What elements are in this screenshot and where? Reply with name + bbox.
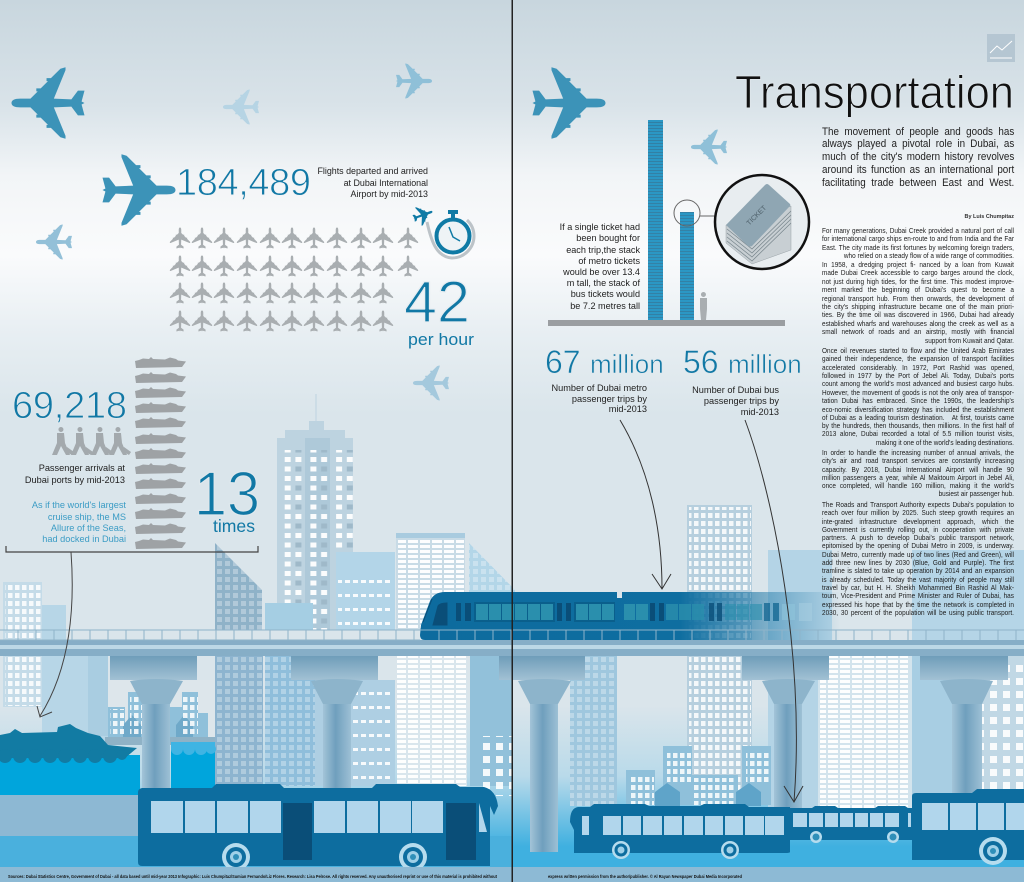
icon: walking passengers [52, 427, 131, 455]
bus caption: Number of Dubai bus [692, 385, 779, 395]
body paragraph 3: Once oil revenues started to flow and the United Arab Emirates [822, 346, 1014, 355]
body paragraph 4 [822, 388, 1014, 447]
body paragraph 6: tramline is slated to take up operation by 2014 and an expansion [822, 566, 1014, 575]
intro paragraph: much of the city's modern history revolves [822, 151, 1014, 163]
stat: 56 million [683, 344, 802, 380]
ticket caption [560, 222, 640, 311]
body paragraph 6: is already scheduled. Today the vast majority of people may still [822, 575, 1014, 584]
body paragraph 1: who relied on a steady flow of a wide range of commodities. [844, 251, 1014, 260]
metro train [420, 592, 840, 640]
body paragraph 6: travel by car, but H. H. Sheikh Mohammed Bin Rashid Al Mak- [822, 583, 1014, 592]
passenger caption: Dubai ports by mid-2013 [25, 475, 125, 485]
body paragraph 4: However, the movement of goods is not the only area of transpor- [822, 388, 1014, 397]
stat: 42 per hour: per hour [408, 331, 475, 349]
ticket caption: been bought for [576, 233, 640, 243]
body paragraph 4: of Dubai as a leading tourism destination. At first, tourists came [822, 413, 1014, 422]
body paragraph 5: once completed, will handle 160 million, making it the world's [822, 481, 1014, 490]
body paragraph 1: East. The city made its first fortunes by welcoming foreign traders, [822, 243, 1014, 252]
body paragraph 2: ment marked the beginning of Dubai's quest to become a [822, 285, 1014, 294]
body paragraph 2 [822, 260, 1014, 345]
body paragraph 3: accelerated considerably. In 1972, Port Rashid was opened, [822, 363, 1014, 372]
flights caption [317, 166, 428, 199]
cruise ship comparison caption: had docked in Dubai [42, 534, 126, 544]
bracket and arrow to ship [6, 546, 258, 717]
body paragraph 1: For many generations, Dubai Creek provided a natural port of call [822, 226, 1014, 235]
intro paragraph [822, 126, 1014, 189]
arrow to bus [745, 420, 803, 802]
body paragraph 6: Dubai Metro, currently made up of two lines (Red and Green), will [822, 550, 1014, 559]
flights caption: Airport by mid-2013 [351, 189, 428, 199]
bus far right [912, 789, 1024, 865]
body paragraph 6: toum, Vice-President and Prime Minister and Ruler of Dubai, has [822, 591, 1014, 600]
bus caption: passenger trips by [704, 396, 779, 406]
flights caption: at Dubai International [344, 178, 428, 188]
ticket caption: of metro tickets [578, 256, 640, 266]
body paragraph 2: not just during high tides, for the first time. This modest improve- [822, 277, 1014, 286]
body paragraph 1: for international cargo ships en-route to and from India and the Far [822, 234, 1014, 243]
body paragraph 6: The Roads and Transport Authority expects Dubai's population to [822, 500, 1014, 509]
ticket caption: m tall, the stack of [567, 278, 640, 288]
icon: chart badge [987, 34, 1015, 62]
arrow to train [620, 420, 671, 589]
bus caption [692, 385, 779, 417]
body paragraph 2: ties. By the time oil was discovered in 1966, Dubai had already [822, 310, 1014, 319]
ticket caption: each trip,the stack [566, 245, 640, 255]
ticket caption: be 7.2 metres tall [570, 301, 640, 311]
stat: 13 times: 13 [194, 460, 260, 529]
body paragraph 3: gained their independence, the expansion of transport facilities [822, 354, 1014, 363]
body paragraph 3: followed in 1977 by the Port of Jebel Ali. Today, Dubai's ports [822, 371, 1014, 380]
plane light left [36, 224, 72, 260]
stat: 184,489 flights: 184,489 [176, 162, 311, 204]
body paragraph 6: 2030, 30 percent of the population will be using public transport. [822, 608, 1014, 617]
stat: 67 million: 67 [545, 344, 581, 380]
plane light mid [223, 89, 259, 125]
plane large 184,489 [102, 154, 176, 226]
body paragraph 6 [822, 500, 1014, 617]
ticket stack bars [648, 120, 694, 320]
flights caption: Flights departed and arrived [317, 166, 428, 176]
viaduct [0, 640, 1024, 852]
body paragraph 2: the city's shipping infrastructure became one of the main priori- [822, 302, 1014, 311]
stat: 42 per hour: 42 [404, 270, 470, 335]
bus right middle [790, 806, 912, 843]
skyline buildings behind viaduct [3, 394, 1024, 811]
intro paragraph: facilitating trade between East and West. [822, 177, 1014, 189]
intro paragraph: The movement of people and goods has [822, 126, 1014, 138]
body paragraph 2: In 1958, a dredging project fi- nanced by a loan from Kuwait [822, 260, 1014, 269]
plane grid [170, 228, 418, 332]
magnifier: ticket stack detail: TICKET [746, 204, 769, 227]
body paragraph 5: In order to handle the increasing number of annual arrivals, the [822, 448, 1014, 457]
metro caption [552, 383, 647, 414]
body paragraph 2: small network of roads and an airstrip, mostly with financial [822, 327, 1014, 336]
cruise ship [0, 724, 137, 763]
stat: 67 million: million [590, 349, 664, 379]
icon: stopwatch with plane [410, 202, 474, 258]
footer strip [0, 867, 1024, 882]
ticket caption: would be over 13.4 [562, 267, 640, 277]
cruise ship comparison caption: As if the world's largest [32, 500, 126, 510]
metro caption: passenger trips by [572, 394, 647, 404]
body paragraph 4: 2013 alone, Dubai recorded a total of 5.5 million tourist visits, [822, 429, 1014, 438]
ticket caption: bus tickets would [571, 289, 640, 299]
body paragraph 6: partners. A push to develop Dubai's public transport network, [822, 533, 1014, 542]
bus left [138, 784, 498, 871]
stat: 56 million: million [728, 349, 802, 379]
cruise ship comparison caption: Allure of the Seas, [51, 523, 126, 533]
body paragraph 4: tation Dubai has embraced. Since the 1990s, the leadership's [822, 396, 1014, 405]
cruise ship comparison caption: cruise ship, the MS [48, 512, 126, 522]
passenger caption: Passenger arrivals at [39, 463, 125, 473]
plane large right page [532, 67, 606, 139]
low-rise houses [108, 692, 771, 806]
ground line [548, 320, 785, 326]
intro paragraph: always played a pivotal role in Dubai, as [822, 138, 1014, 150]
body paragraph 5: city's air and road transport services are constantly increasing [822, 456, 1014, 465]
body paragraph 5: million passengers a year, while Al Maktoum Airport in Jebel Ali, [822, 473, 1014, 482]
ticket caption: If a single ticket had [560, 222, 640, 232]
bus right front [570, 804, 790, 859]
body paragraph 6: epitomised by the opening of Dubai Metro in 2009, is underway. [822, 541, 1014, 550]
water and road [0, 737, 512, 867]
plane light top [396, 63, 432, 99]
cruise ship comparison caption [32, 500, 126, 544]
body paragraph 3: count among the world's most advanced and busiest cargo hubs. [822, 379, 1014, 388]
body paragraph 5: busiest air passenger hub. [939, 489, 1014, 498]
body paragraph 2: regional transport hub. From then onwards, the development of [822, 294, 1014, 303]
body paragraph 2: support from Kuwait and Qatar. [925, 336, 1014, 345]
body paragraph 3 [822, 346, 1014, 388]
stat: 13 times: times [213, 516, 255, 536]
plane large top left [11, 67, 84, 139]
stat: 56 million: 56 [683, 344, 719, 380]
stat: 69,218 passengers: 69,218 [12, 385, 127, 427]
metro caption: mid-2013 [609, 404, 647, 414]
footer sources: Sources: Dubai Statistics Centre, Government of Dubai - all data based until mid-year 2013 Infographic: Luis Chumpitaz/Sumian Fernando/Liz Flores. Research: Lisa Pelrose. All rights reserved. Any unauthorised reprint or use of this material is prohibited without [8, 874, 498, 879]
plane light right [413, 365, 449, 401]
body paragraph 2: made Dubai Creek accessible to cargo barges around the clock, [822, 268, 1014, 277]
bus caption: mid-2013 [741, 407, 779, 417]
stack of cruise ships [135, 357, 186, 549]
page divider [512, 0, 513, 882]
rail fence [0, 630, 1024, 640]
byline: By Luis Chumpitaz [964, 214, 1014, 220]
plane light beside bars [691, 129, 727, 165]
body paragraph 6: Government is currently rolling out, in cooperation with private [822, 525, 1014, 534]
body paragraph 1 [822, 226, 1014, 260]
intro paragraph: around its function as an international port [822, 164, 1014, 176]
body paragraph 6: add three new lines by 2030 (Blue, Gold and Purple). The first [822, 558, 1014, 567]
body paragraph 5 [822, 448, 1014, 498]
title: Transportation [735, 66, 1014, 118]
body paragraph 6: expressed his hope that by the time the network is completed in [822, 600, 1014, 609]
body paragraph 6: reach over four million by 2025. Such steep growth requires an [822, 508, 1014, 517]
footer publisher: express written permission from the author/publisher. © Al Rayan Newspaper Dubai Media Incorporated [548, 874, 742, 879]
stat: 67 million [545, 344, 664, 380]
passenger caption [25, 463, 125, 485]
body paragraph 4: making it one of the world's leading destinations. [876, 438, 1014, 447]
icon: person for scale [700, 292, 707, 320]
body paragraph 4: eco-nomic diversification strategy has included the establishment [822, 405, 1014, 414]
body paragraph 6: inte-grated infrastructure development approach, which the [822, 517, 1014, 526]
body paragraph 5: capacity. By 2018, Dubai International Airport will handle 90 [822, 465, 1014, 474]
metro caption: Number of Dubai metro [552, 383, 647, 393]
body paragraph 4: by the hundreds, then thousands, then millions. In the first half of [822, 421, 1014, 430]
body paragraph 2: established wharfs and warehouses along the creek as well as a [822, 319, 1014, 328]
magnifier: ticket stack detail [674, 175, 809, 269]
